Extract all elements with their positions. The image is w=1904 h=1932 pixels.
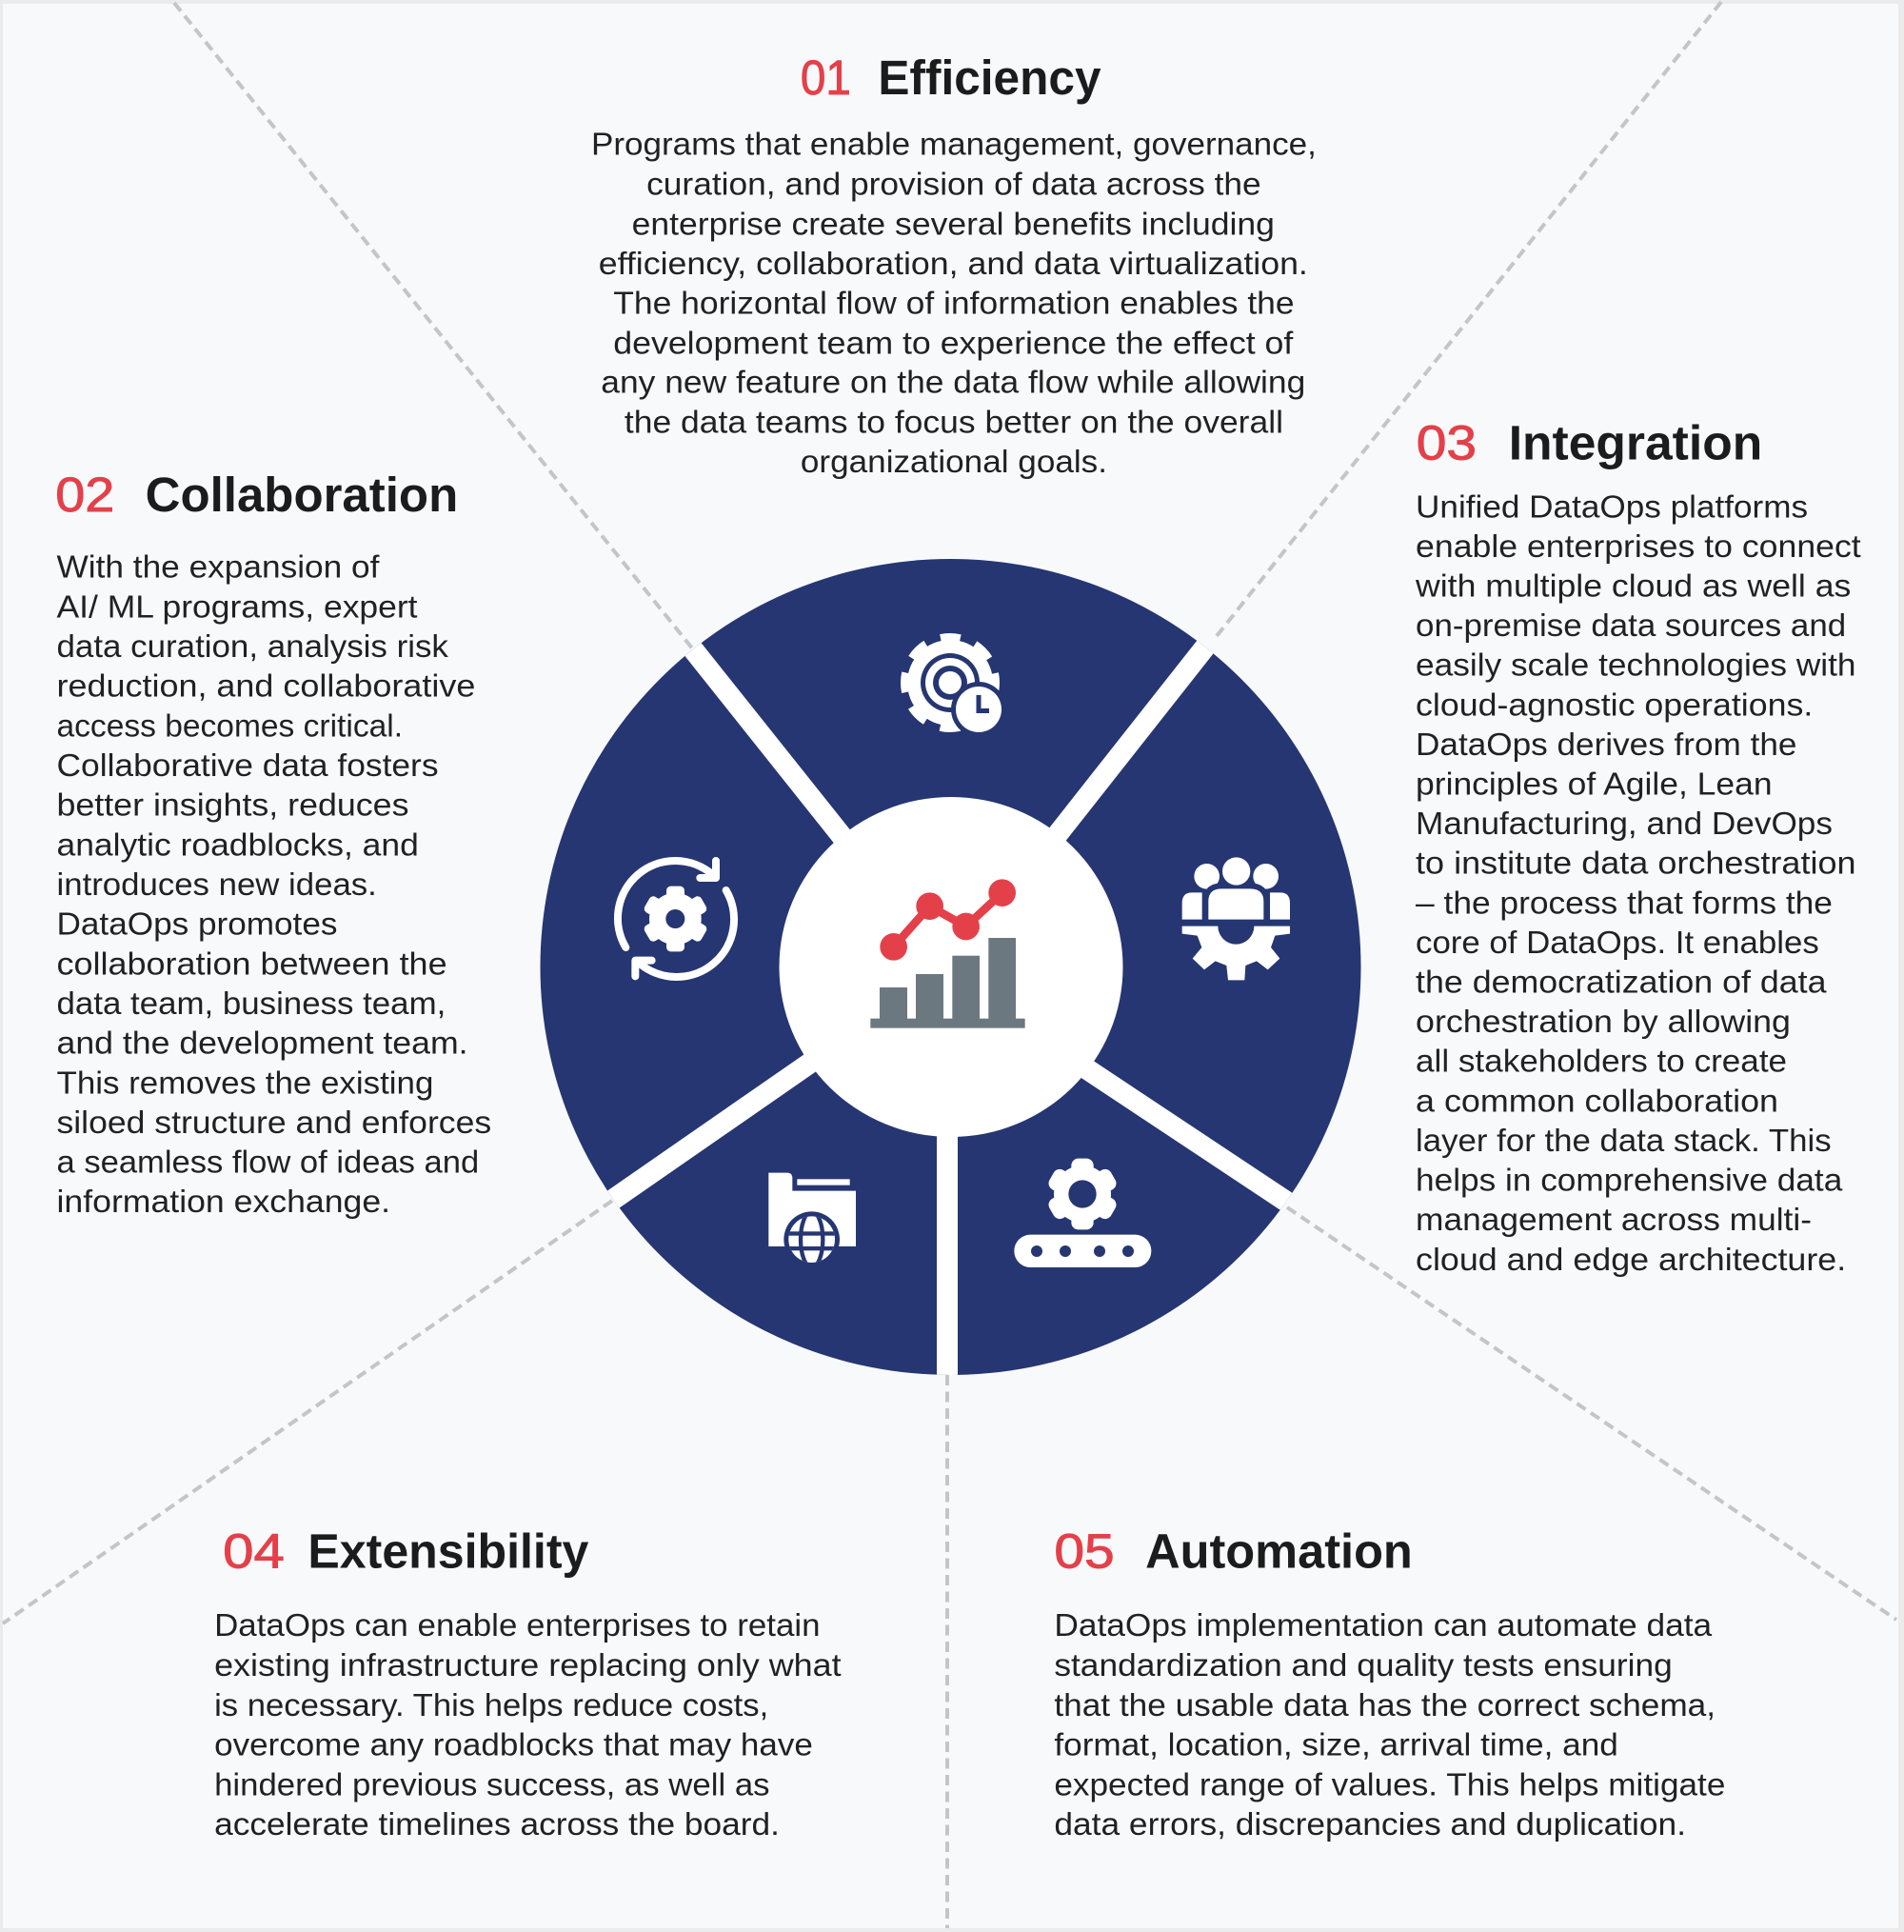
text: efficiency body: organizational goals. (801, 444, 1107, 479)
text: automation body (1054, 1607, 1725, 1842)
donut diagram (541, 559, 1361, 1381)
text: integration body (1415, 488, 1861, 1277)
text: collaboration body: a seamless flow of ideas and (57, 1145, 479, 1180)
icon: refresh gear (618, 861, 734, 977)
icon: gear with clock (904, 637, 1006, 737)
text: integration body: helps in comprehensive data (1416, 1163, 1843, 1198)
text: extensibility body: is necessary. This helps reduce costs, (214, 1687, 768, 1723)
text: integration body: the democratization of data (1416, 965, 1827, 1000)
text: integration body: Unified DataOps platforms (1416, 488, 1808, 524)
text: collaboration body: access becomes critical. (57, 707, 403, 743)
text: extensibility body: DataOps can enable enterprises to retain (214, 1607, 821, 1643)
text: integration body: easily scale technologies with (1416, 647, 1856, 683)
heading: 01 efficiency: Efficiency (878, 50, 1101, 105)
heading: 02 collaboration: 02 (55, 468, 114, 522)
panel: 02 collaboration (55, 468, 491, 1219)
text: collaboration body: better insights, reduces (57, 787, 408, 823)
heading: 05 automation: 05 (1054, 1524, 1115, 1579)
icon: conveyor gear (1014, 1159, 1151, 1267)
text: integration body: cloud-agnostic operations. (1416, 687, 1813, 722)
text: efficiency body: any new feature on the data flow while allowing (601, 365, 1305, 400)
text: integration body: on-premise data sources and (1416, 607, 1846, 643)
text: integration body: DataOps derives from the (1416, 727, 1796, 762)
text: integration body: management across multi- (1416, 1202, 1812, 1237)
heading: 03 integration: Integration (1509, 416, 1762, 470)
text: collaboration body: Collaborative data fosters (57, 747, 439, 783)
text: efficiency body: The horizontal flow of information enables the (613, 286, 1295, 321)
heading: 05 automation: Automation (1145, 1524, 1413, 1579)
text: automation body: that the usable data has the correct schema, (1054, 1687, 1716, 1723)
text: integration body: layer for the data stack. This (1416, 1123, 1832, 1158)
text: efficiency body: efficiency, collaboration, and data virtualization. (599, 246, 1308, 281)
text: collaboration body: reduction, and collaborative (57, 668, 475, 704)
text: extensibility body (214, 1607, 842, 1842)
text: collaboration body: data team, business team, (57, 986, 446, 1021)
panel: 01 efficiency (591, 50, 1317, 479)
text: automation body: expected range of values. This helps mitigate (1054, 1766, 1725, 1802)
text: integration body: orchestration by allowing (1416, 1004, 1791, 1039)
outer ring segments (541, 559, 1361, 1375)
text: integration body: cloud and edge architecture. (1416, 1242, 1846, 1277)
text: collaboration body: With the expansion of (57, 549, 380, 585)
panel: 04 extensibility (214, 1524, 842, 1842)
heading: 04 extensibility: 04 (223, 1524, 285, 1579)
text: extensibility body: existing infrastructure replacing only what (214, 1647, 842, 1683)
icon: team and gear (1182, 854, 1290, 980)
text: integration body: core of DataOps. It enables (1416, 925, 1819, 960)
text: integration body: enable enterprises to connect (1416, 528, 1861, 564)
text: automation body: data errors, discrepancies and duplication. (1054, 1806, 1686, 1842)
text: collaboration body: introduces new ideas. (57, 866, 377, 902)
icon: center chart (870, 879, 1025, 1028)
text: integration body: principles of Agile, Lean (1416, 767, 1773, 802)
text: integration body: to institute data orchestration (1416, 846, 1856, 881)
text: collaboration body: analytic roadblocks, and (57, 827, 419, 862)
text: extensibility body: hindered previous success, as well as (214, 1766, 770, 1802)
panel: 03 integration (1415, 416, 1861, 1277)
text: collaboration body: siloed structure and enforces (57, 1105, 491, 1140)
text: integration body: all stakeholders to create (1416, 1044, 1787, 1079)
text: efficiency body: Programs that enable management, governance, (591, 127, 1317, 162)
text: collaboration body: and the development team. (57, 1026, 468, 1061)
text: integration body: a common collaboration (1416, 1083, 1778, 1118)
text: efficiency body: curation, and provision of data across the (646, 167, 1261, 202)
text: integration body: – the process that forms the (1416, 885, 1833, 920)
text: efficiency body: development team to experience the effect of (613, 325, 1294, 360)
heading: 01 efficiency: 01 (801, 50, 851, 105)
text: extensibility body: accelerate timelines across the board. (214, 1806, 780, 1842)
text: collaboration body: data curation, analysis risk (57, 628, 448, 664)
center circle (779, 797, 1123, 1137)
text: collaboration body: information exchange. (57, 1184, 390, 1219)
heading: 03 integration: 03 (1417, 416, 1477, 470)
text: automation body: standardization and quality tests ensuring (1054, 1647, 1673, 1683)
panel: 05 automation (1054, 1524, 1725, 1842)
heading: 04 extensibility: Extensibility (307, 1524, 589, 1579)
text: extensibility body: overcome any roadblocks that may have (214, 1726, 813, 1762)
text: collaboration body: This removes the existing (57, 1065, 433, 1100)
text: collaboration body: DataOps promotes (57, 906, 337, 942)
text: automation body: format, location, size, arrival time, and (1054, 1726, 1618, 1762)
text: collaboration body: AI/ ML programs, expert (57, 588, 418, 624)
text: integration body: with multiple cloud as well as (1415, 568, 1851, 604)
text: collaboration body (57, 549, 491, 1219)
text: collaboration body: collaboration between the (57, 946, 447, 981)
heading: 02 collaboration: Collaboration (146, 468, 458, 522)
text: efficiency body: the data teams to focus better on the overall (625, 404, 1283, 439)
text: efficiency body: enterprise create several benefits including (632, 206, 1275, 241)
text: automation body: DataOps implementation can automate data (1054, 1607, 1713, 1643)
text: efficiency body (591, 127, 1317, 479)
text: integration body: Manufacturing, and DevOps (1416, 806, 1833, 841)
icon: folder with globe (768, 1173, 856, 1268)
